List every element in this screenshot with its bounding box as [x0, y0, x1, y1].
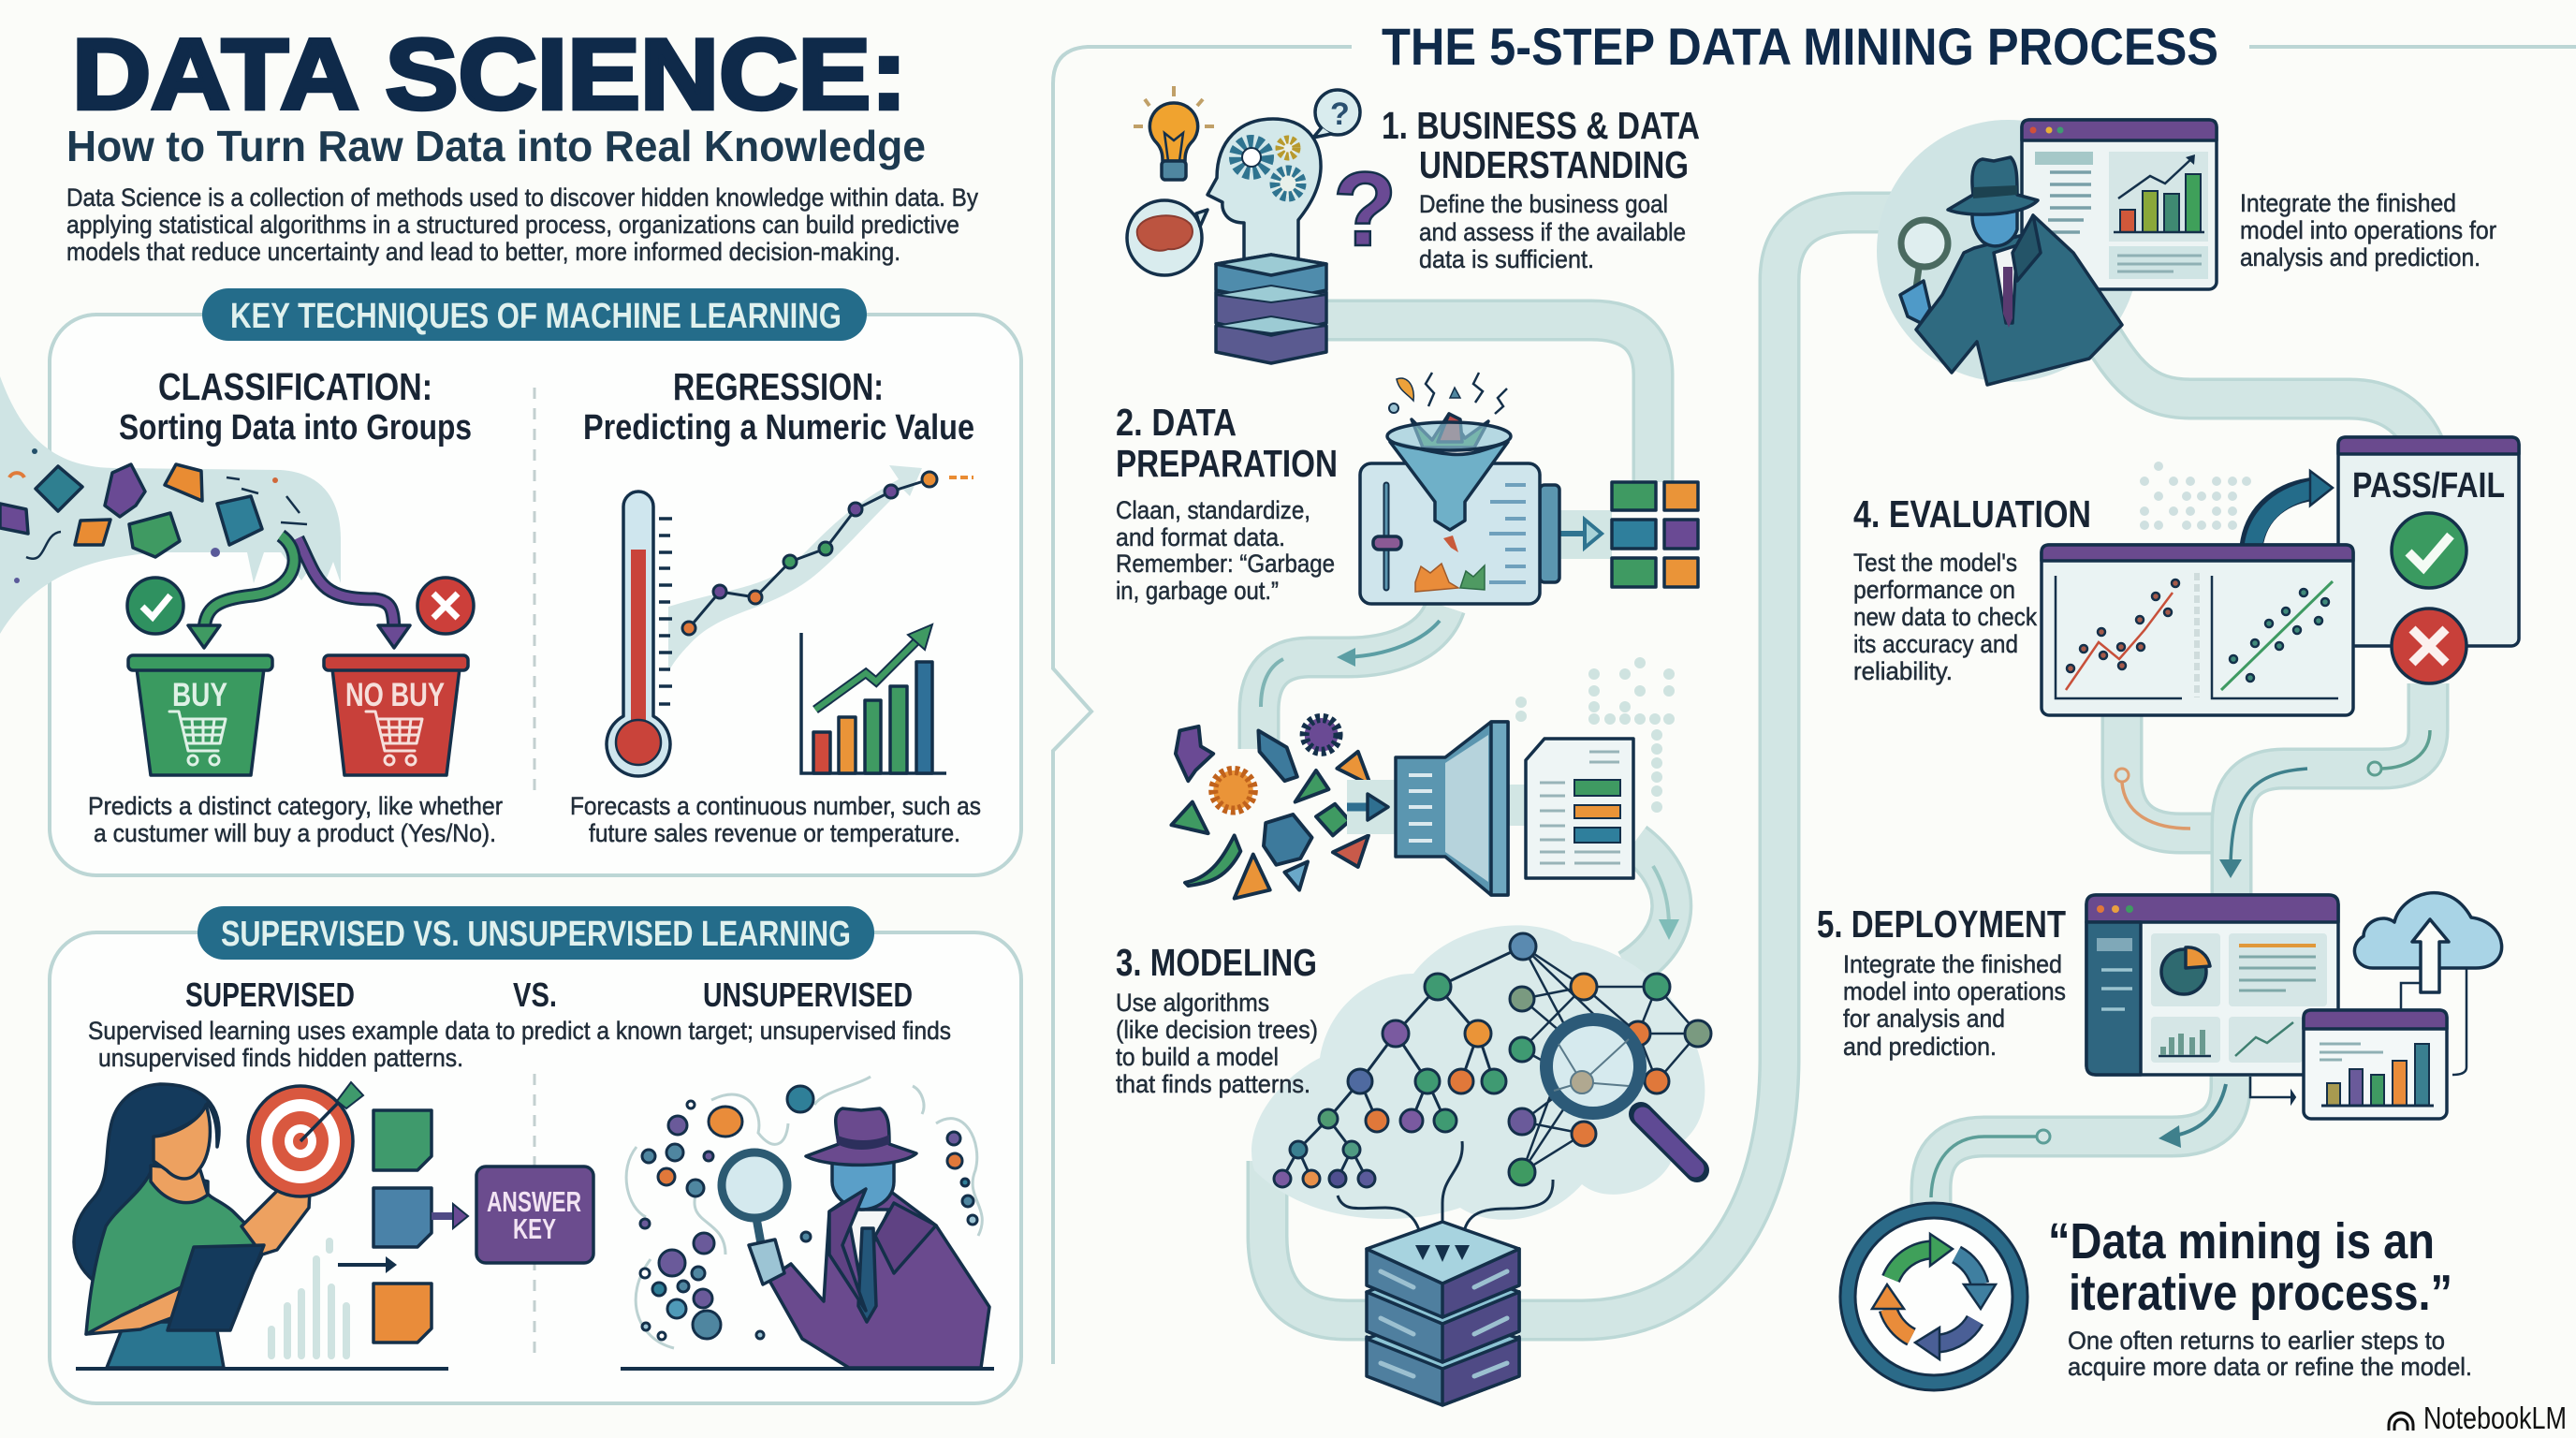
- quote callout: iterative process.”: [2069, 1265, 2452, 1321]
- icon: red cross: [417, 578, 474, 634]
- step 1 text: [1382, 104, 1700, 273]
- intro paragraph: models that reduce uncertainty and lead to better, more informed decision-making.: [66, 238, 900, 266]
- step 2 text: 2. DATA: [1116, 401, 1237, 444]
- sorting arrows: [188, 536, 410, 648]
- decision tree: [1274, 946, 1523, 1187]
- subtitle: How to Turn Raw Data into Real Knowledge: [66, 122, 926, 170]
- deployment dashboard window: [2086, 895, 2338, 1075]
- step 1 text: 1. BUSINESS & DATA: [1382, 104, 1700, 147]
- quote callout: [2048, 1213, 2472, 1381]
- speech bubble brain: [1127, 200, 1208, 275]
- classification heading: CLASSIFICATION:: [158, 365, 432, 408]
- cloud upload icon: [2354, 893, 2502, 1075]
- bucket: no buy: NO BUY: [345, 677, 445, 713]
- step 4 text: Test the model's: [1853, 549, 2017, 577]
- bucket: buy: BUY: [172, 677, 227, 713]
- pale data bars: [271, 1241, 346, 1356]
- labelled data cards: [338, 1110, 468, 1343]
- classification heading: [119, 365, 472, 448]
- step 1 text: UNDERSTANDING: [1419, 143, 1689, 186]
- curved arrow to pass/fail: [2251, 471, 2333, 547]
- step 3 text: that finds patterns.: [1116, 1070, 1310, 1098]
- step 3 text: Use algorithms: [1116, 989, 1269, 1017]
- title: DATA SCIENCE:: [72, 18, 907, 130]
- step 5 text: Integrate the finished: [1843, 950, 2062, 978]
- panel: supervised vs unsupervised learning: [50, 906, 1021, 1403]
- illustration: woman with tablet: [74, 1084, 311, 1368]
- pass icon: [2392, 513, 2466, 588]
- scattered raw data shards: [1171, 718, 1370, 899]
- step 4 text: performance on: [1853, 576, 2015, 604]
- regression description: future sales revenue or temperature.: [589, 819, 960, 847]
- step 3 text: [1116, 941, 1318, 1098]
- comparison headings: VS.: [513, 976, 557, 1014]
- process title: THE 5-STEP DATA MINING PROCESS: [1382, 17, 2218, 76]
- output band and arrow: [1559, 510, 1612, 559]
- step 4 text: [1853, 492, 2091, 685]
- comparison description: Supervised learning uses example data to predict a known target; unsupervised finds: [88, 1017, 951, 1045]
- step 3 text: to build a model: [1116, 1043, 1279, 1071]
- quote callout: One often returns to earlier steps to: [2068, 1327, 2445, 1355]
- database stack: [1216, 255, 1326, 363]
- comparison headings: SUPERVISED: [185, 976, 355, 1014]
- step 1 text: data is sufficient.: [1419, 245, 1594, 273]
- output document: [1526, 739, 1633, 878]
- bucket: buy: [128, 655, 272, 775]
- step 5 text: and prediction.: [1843, 1033, 1997, 1061]
- step 2 text: Claan, standardize,: [1116, 496, 1310, 524]
- intro paragraph: [66, 183, 978, 266]
- database stack (modeling): [1367, 1222, 1519, 1405]
- pale data dots near step 2 output: [1515, 657, 1675, 813]
- panel: key techniques of machine learning: [0, 288, 1021, 875]
- comparison description: [88, 1017, 951, 1072]
- scattered unlabelled data clusters: [626, 1077, 982, 1348]
- background cloud: [1251, 925, 1705, 1220]
- step 3 text: (like decision trees): [1116, 1016, 1318, 1044]
- step 5 text: model into operations: [1843, 977, 2066, 1005]
- classification description: Predicts a distinct category, like whether: [88, 792, 503, 820]
- step 2 text: [1116, 401, 1338, 605]
- intro paragraph: Data Science is a collection of methods used to discover hidden knowledge within data. By: [66, 183, 978, 212]
- step 1 illustration: head, bulb, gears and database: [1127, 86, 1397, 363]
- dashboard window: [2022, 120, 2217, 289]
- pill heading: supervised vs unsupervised: SUPERVISED VS. UNSUPERVISED LEARNING: [221, 915, 851, 954]
- evaluation charts window: [2042, 545, 2353, 715]
- machine body: [1360, 463, 1559, 604]
- pipeline direction arrows: [1261, 621, 1679, 940]
- intro paragraph: applying statistical algorithms in a structured process, organizations can build predictive: [66, 211, 959, 239]
- regression trend line: [668, 465, 973, 674]
- illustration: purple detective with magnifier: [722, 1108, 989, 1368]
- quote callout: “Data mining is an: [2048, 1213, 2435, 1269]
- step 2 text: PREPARATION: [1116, 442, 1338, 485]
- step 1 text: and assess if the available: [1419, 218, 1686, 246]
- comparison headings: UNSUPERVISED: [703, 976, 913, 1014]
- answer key box: [476, 1167, 593, 1263]
- step 2 text: Remember: “Garbage: [1116, 550, 1335, 578]
- decorative pipeline markers after evaluation: [2115, 730, 2430, 878]
- pie chart: [2161, 947, 2210, 994]
- step 4 text: its accuracy and: [1853, 630, 2018, 658]
- pass/fail window: [2338, 437, 2519, 683]
- answer key box: ANSWER: [487, 1185, 581, 1218]
- comparison headings: [185, 976, 913, 1014]
- step 3 text: 3. MODELING: [1116, 941, 1317, 984]
- regression heading: Predicting a Numeric Value: [583, 408, 974, 448]
- process pipeline paths: [1259, 213, 2428, 1320]
- step 4 text: reliability.: [1853, 657, 1953, 685]
- pale data dots above evaluation: [2140, 462, 2251, 530]
- step 2 text: in, garbage out.”: [1116, 577, 1279, 605]
- bucket: no buy: [324, 655, 468, 775]
- step 2 text: and format data.: [1116, 523, 1285, 551]
- data stream with scattered shards: [0, 376, 341, 634]
- integrate description text: [2240, 189, 2496, 271]
- scatter chart: good fit: [2212, 576, 2338, 698]
- regression heading: [583, 365, 974, 448]
- icon: green check: [127, 578, 183, 634]
- icon: thermometer: [607, 492, 672, 776]
- step 2 illustration: funnel machine: [1360, 373, 1698, 604]
- filter device: [1396, 722, 1508, 895]
- regression heading: REGRESSION:: [673, 365, 884, 408]
- speech bubble question: [1313, 90, 1360, 138]
- detective figure: [1900, 157, 2122, 385]
- step 5 text: [1817, 902, 2066, 1061]
- icon: iterative cycle: [1848, 1211, 2020, 1383]
- answer key box: KEY: [513, 1212, 556, 1245]
- quote callout: acquire more data or refine the model.: [2068, 1353, 2472, 1381]
- business understanding detective with dashboard: [1877, 120, 2217, 385]
- bar chart with rising arrow: [801, 624, 946, 773]
- pass/fail window: PASS/FAIL: [2352, 466, 2505, 506]
- sorted data grid: [1612, 482, 1698, 587]
- regression description: Forecasts a continuous number, such as: [570, 792, 981, 820]
- speech bubble question: ?: [1330, 96, 1350, 132]
- fail icon: [2392, 609, 2466, 683]
- pill heading: key techniques: KEY TECHNIQUES OF MACHINE LEARNING: [230, 297, 842, 336]
- pill heading: key techniques: [202, 288, 867, 341]
- step 5 text: 5. DEPLOYMENT: [1817, 902, 2066, 946]
- icon: target with arrow: [248, 1082, 363, 1196]
- integrate description text: analysis and prediction.: [2240, 243, 2481, 271]
- deployment flow arrow: [1931, 1084, 2226, 1197]
- small bar chart window: [2250, 1010, 2447, 1119]
- icon: light bulb: [1134, 86, 1214, 180]
- arrows into database: [1338, 1141, 1553, 1250]
- process frame outline: [1053, 47, 2576, 1364]
- classification heading: Sorting Data into Groups: [119, 408, 472, 448]
- step 4 text: new data to check: [1853, 603, 2037, 631]
- regression description: [570, 792, 981, 847]
- icon: magnifying glass: [1546, 1020, 1697, 1170]
- integrate description text: Integrate the finished: [2240, 189, 2456, 217]
- modeling illustration: decision tree and network: [1251, 925, 1711, 1250]
- pill heading: supervised vs unsupervised: [198, 906, 874, 960]
- scatter chart: overfit: [2056, 576, 2182, 698]
- step 5 text: for analysis and: [1843, 1005, 2005, 1033]
- integrate description text: model into operations for: [2240, 216, 2496, 244]
- classification description: [88, 792, 503, 847]
- funnel with debris: [1387, 373, 1511, 530]
- classification description: a custumer will buy a product (Yes/No).: [94, 819, 496, 847]
- blue arrow into filter: [1347, 780, 1527, 834]
- purple question mark: ?: [1333, 151, 1397, 268]
- neural network: [1509, 933, 1711, 1185]
- head silhouette with gears: [1208, 119, 1321, 262]
- comparison description: unsupervised finds hidden patterns.: [98, 1044, 463, 1072]
- step 1 text: Define the business goal: [1419, 190, 1668, 218]
- step 4 text: 4. EVALUATION: [1853, 492, 2091, 536]
